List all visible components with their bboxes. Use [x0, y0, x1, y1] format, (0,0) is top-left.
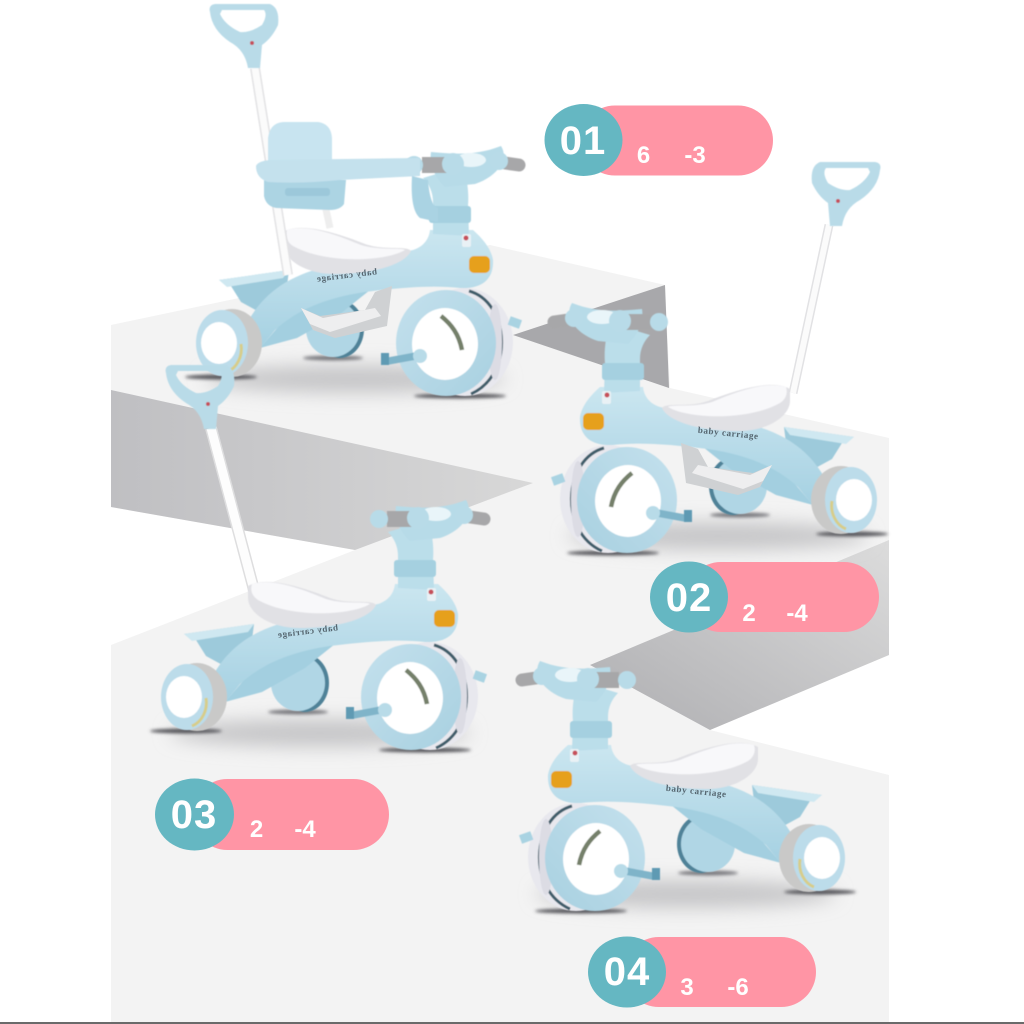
tricycle 04: balance mode without handle [519, 661, 856, 914]
badge 02: age 2 - 4: -4 [786, 600, 808, 627]
brand text: baby carriage [277, 622, 339, 640]
badge 04: age 3 - 6: 3 [680, 974, 694, 1001]
step side: upper right [513, 285, 669, 388]
badge 01: age 6 - 3 [544, 104, 773, 176]
badge 02: age 2 - 4: 02 [666, 576, 712, 620]
badge 01: age 6 - 3: 01 [560, 119, 606, 163]
badge 04: age 3 - 6: -6 [727, 974, 749, 1001]
tricycle 03: balance mode with push handle [150, 365, 487, 752]
badge 03: age 2 - 4 [155, 778, 389, 850]
brand text: baby carriage [316, 266, 378, 284]
tricycle 02: pedal mode with push handle [551, 162, 888, 556]
badge 02: age 2 - 4 [650, 562, 879, 632]
badge 01: age 6 - 3: 6 [637, 142, 650, 169]
step side: lower right [590, 540, 889, 730]
badge 03: age 2 - 4: 2 [250, 816, 263, 843]
tricycle 01: full mode with push handle, backrest and guard tray [185, 4, 522, 398]
badge 01: age 6 - 3: -3 [684, 142, 706, 169]
badge 03: age 2 - 4: 03 [171, 793, 217, 837]
badge 03: age 2 - 4: -4 [294, 816, 316, 843]
brand text: baby carriage [697, 425, 759, 441]
badge 04: age 3 - 6: 04 [604, 950, 650, 994]
bottom edge line [0, 1022, 1024, 1024]
badge 04: age 3 - 6 [588, 936, 816, 1008]
brand text: baby carriage [665, 783, 727, 799]
step side: left [111, 390, 533, 550]
badge 02: age 2 - 4: 2 [742, 600, 756, 627]
